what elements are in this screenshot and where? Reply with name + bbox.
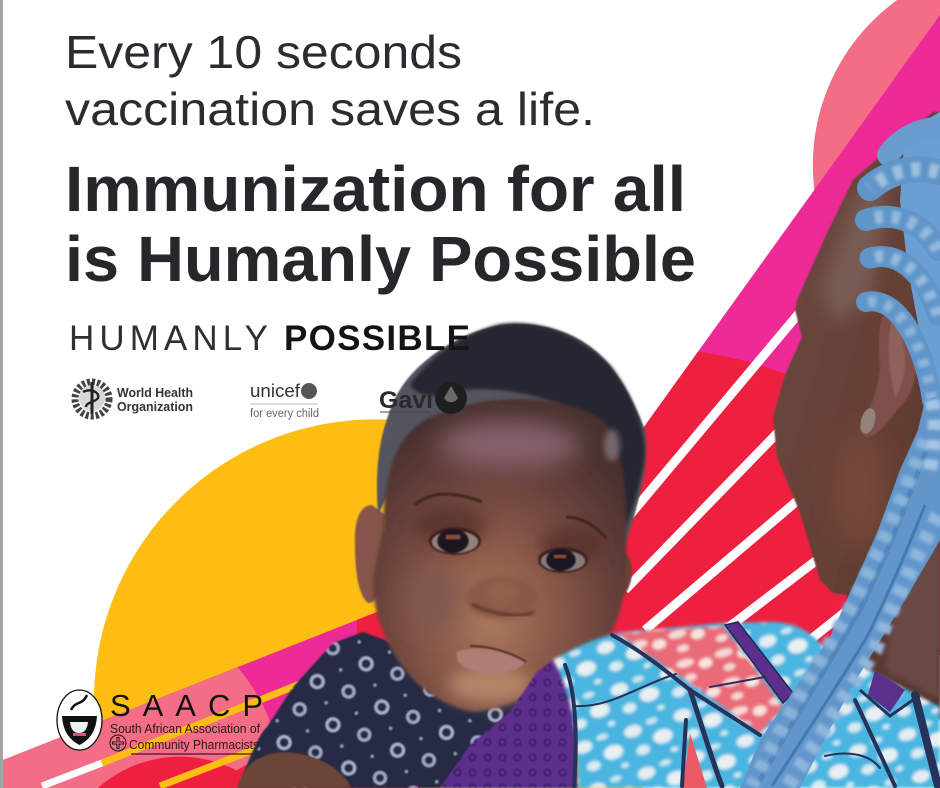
purple section: [440, 660, 578, 788]
logo: UNICEF: unicef: [250, 381, 301, 401]
left eyebrow: [415, 494, 482, 505]
heading: Every 10 seconds vaccination saves a life: vaccination saves a life.: [65, 83, 595, 135]
right ear: [615, 554, 632, 600]
salmon circle top right: [813, 0, 940, 247]
logo: SAACP: Community Pharmacists: [129, 738, 259, 752]
hair grey base: [377, 324, 646, 545]
logo: UNICEF: for every child: [250, 408, 319, 420]
campaign wordmark: Humanly Possible: HUMANLY: [69, 319, 268, 358]
blue batik: [553, 622, 940, 788]
heading: Every 10 seconds vaccination saves a life: Every 10 seconds: [65, 26, 462, 78]
left ear: [355, 505, 385, 603]
right eyebrow: [566, 517, 606, 538]
purple collar detail: [868, 670, 905, 712]
logo: SAACP: South African Association of: [110, 722, 260, 736]
cheek shading: [832, 430, 888, 550]
title: Immunization for all is Humanly Possible: [65, 153, 696, 295]
logo: World Health Organization: World Health: [117, 386, 193, 400]
pharmacy cross icon: [110, 735, 126, 751]
ear: [860, 309, 917, 437]
lower salmon panel: [683, 733, 707, 788]
temple highlight: [604, 429, 620, 461]
logo: UNICEF: [250, 381, 319, 420]
logo: SAACP: [57, 688, 263, 754]
left edge bar: [0, 0, 3, 788]
photo: mother's upper braids: [866, 112, 940, 460]
neck shading: [885, 510, 940, 700]
hair dark crown: [410, 323, 645, 530]
campaign wordmark: Humanly Possible: [69, 319, 470, 358]
nose: [466, 576, 538, 620]
left eye: [429, 527, 481, 555]
salmon batik panel: [617, 626, 783, 733]
logo: World Health Organization: [75, 382, 193, 416]
purple stripe: [725, 622, 793, 703]
campaign wordmark: Humanly Possible: POSSIBLE: [284, 319, 470, 358]
mother skin: [773, 112, 940, 720]
yellow sun circle: [94, 419, 656, 788]
heading: Every 10 seconds vaccination saves a life: [65, 26, 595, 135]
braid mass: [900, 112, 940, 460]
left cheek: [406, 570, 458, 630]
WHO emblem: [75, 382, 109, 416]
dark seam lines: [565, 635, 938, 786]
right eye: [538, 547, 588, 573]
eye socket shadow left: [414, 505, 486, 545]
photo: mother's head: [773, 112, 940, 720]
chin light: [448, 667, 532, 703]
right diagonal band with red circle and white stripes: [606, 15, 940, 655]
SAACP oval crest: [57, 690, 102, 750]
logo: SAACP: SAACP: [110, 688, 263, 723]
title: Immunization for all is Humanly Possible: is Humanly Possible: [65, 223, 696, 295]
Gavi emblem: [435, 382, 467, 414]
inner ear: [889, 318, 905, 398]
title: Immunization for all is Humanly Possible: Immunization for all: [65, 153, 686, 225]
mouth: [456, 646, 526, 674]
eye socket shadow right: [540, 527, 604, 563]
forehead highlight: [440, 421, 580, 469]
logo: Gavi: [379, 382, 467, 414]
UNICEF globe: [301, 383, 317, 399]
logo: World Health Organization: Organization: [117, 400, 193, 414]
white stripes: [625, 312, 845, 640]
baby's arm: [237, 752, 351, 788]
earring: [858, 407, 878, 435]
lower-left diagonal band: [3, 595, 420, 788]
photo: mother's long braid: [740, 395, 940, 788]
scalp shading: [820, 170, 885, 325]
face: [373, 399, 627, 712]
logo: Gavi: Gavi: [379, 387, 433, 414]
braid base: [740, 395, 940, 788]
photo: baby's head: [355, 323, 646, 712]
photo: baby's clothing: [237, 632, 525, 788]
photo: mother's patterned dress: [440, 622, 940, 788]
